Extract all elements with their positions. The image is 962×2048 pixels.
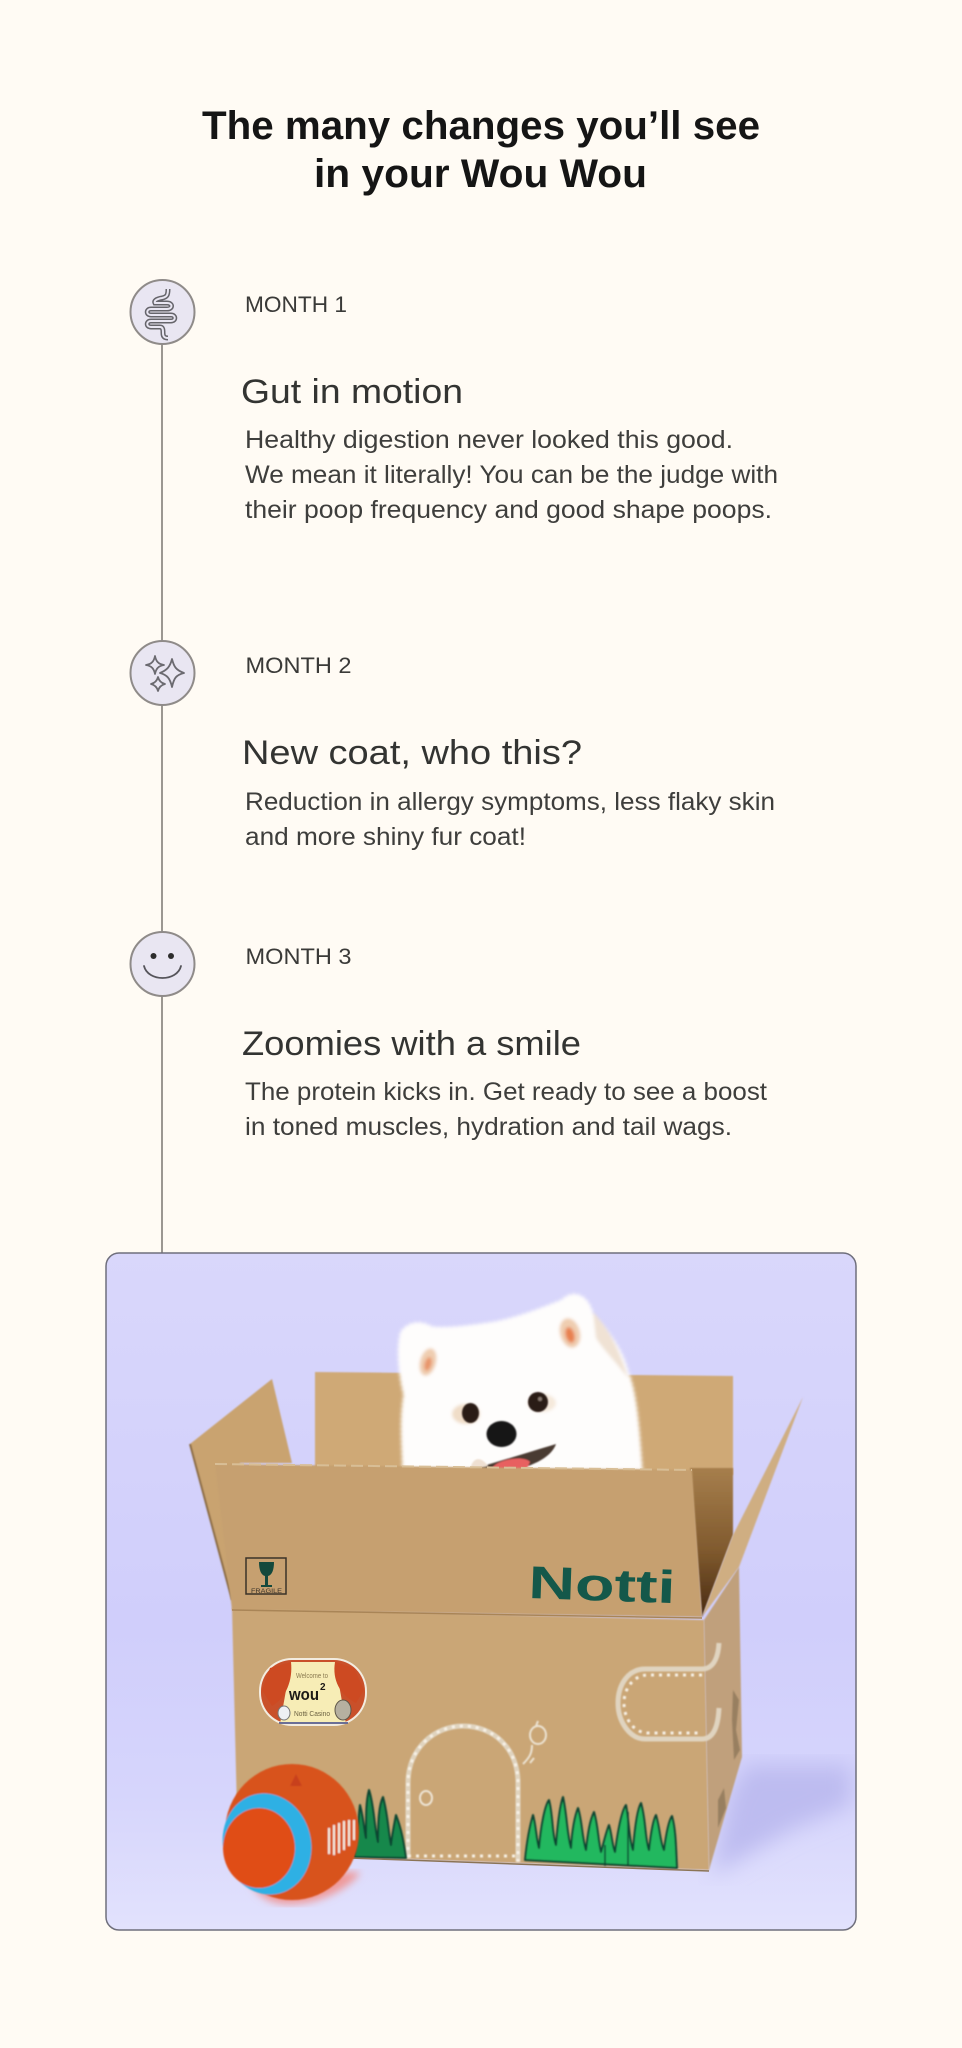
body: month 2: and more shiny fur coat! [245,823,526,851]
body: month 3: in toned muscles, hydration and tail wags. [245,1113,732,1141]
body: month 1 [245,426,778,524]
body: month 1: their poop frequency and good shape poops. [245,496,772,524]
photo panel: dog in box [106,1253,856,1930]
body: month 2: Reduction in allergy symptoms, less flaky skin [245,788,775,816]
body: month 3 [245,1078,767,1141]
logo: Notti: Notti [528,1556,676,1613]
title: The many changes you’ll see [202,104,760,148]
right flap [702,1397,803,1617]
label: month 1: MONTH 1 [245,292,347,317]
step: month 1 [130,280,778,524]
sticker: wou: 2 [320,1682,326,1693]
ball [212,1764,359,1904]
body: month 1: We mean it literally! You can be the judge with [245,461,778,489]
sticker: wou: Welcome to [296,1673,328,1680]
dog [399,1295,642,1471]
timeline line [161,340,163,1254]
icon: intestine [130,280,194,344]
heading: new coat: New coat, who this? [242,734,582,772]
label: month 3: MONTH 3 [246,944,352,969]
sticker: wou: wou [288,1685,319,1704]
body: month 2 [245,788,775,851]
bee drawing [523,1721,546,1764]
box front [232,1608,709,1870]
title: in your Wou Wou [314,152,647,196]
front flap [215,1464,702,1617]
box side [704,1567,742,1870]
label: month 2: MONTH 2 [246,653,352,678]
body: month 3: The protein kicks in. Get ready to see a boost [245,1078,767,1106]
heading: zoomies: Zoomies with a smile [242,1025,581,1063]
icon: fragile mark: FRAGILE [251,1588,283,1595]
icon: sparkles [130,641,194,705]
step: month 3 [130,932,767,1141]
grass right [525,1797,677,1868]
floor shadow [712,1765,851,1875]
path drawing [618,1643,719,1739]
box back [190,1372,733,1600]
body: month 1: Healthy digestion never looked this good. [245,426,733,454]
icon: fragile mark [246,1558,286,1595]
icon: smiley [130,932,194,996]
title [202,104,760,196]
sticker: wou: Notti Casino [294,1711,330,1718]
ball reflection [250,1872,360,1904]
sticker: wou [259,1658,367,1726]
step: month 2 [130,641,775,851]
box interior [690,1468,733,1617]
heading: gut in motion: Gut in motion [241,373,463,411]
grass left [354,1790,406,1858]
door drawing [408,1726,518,1862]
